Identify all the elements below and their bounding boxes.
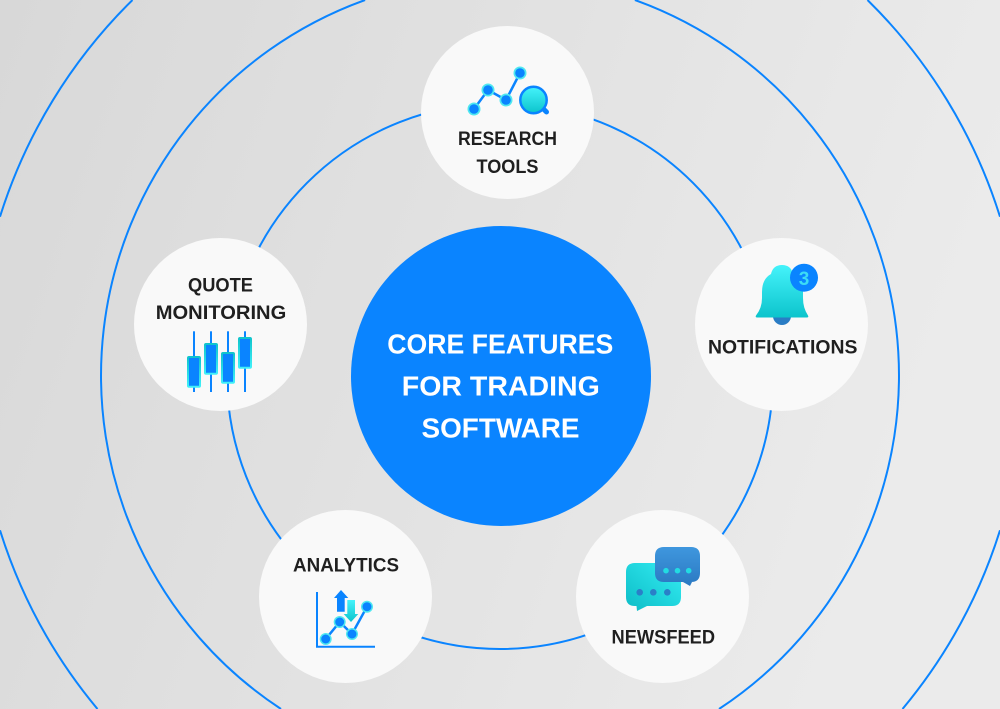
icon: chat bubbles xyxy=(626,547,700,611)
label: ANALYTICS xyxy=(293,555,399,577)
label: NEWSFEED xyxy=(612,626,715,648)
title xyxy=(387,328,613,444)
icon: bell with badge xyxy=(756,264,818,325)
label: QUOTE xyxy=(188,274,253,296)
title: FOR TRADING xyxy=(402,370,600,402)
panel: newsfeed xyxy=(576,510,749,683)
title: CORE FEATURES xyxy=(387,328,613,360)
central circle with title xyxy=(351,226,651,526)
label: NOTIFICATIONS xyxy=(708,336,857,358)
label: TOOLS xyxy=(476,156,538,178)
title: SOFTWARE xyxy=(422,412,580,444)
label xyxy=(156,274,286,324)
panel: research tools xyxy=(421,26,594,199)
panel: quote monitoring xyxy=(134,238,307,411)
icon: bell with badge: 3 xyxy=(799,269,809,290)
label: RESEARCH xyxy=(458,128,557,150)
label: MONITORING xyxy=(156,302,286,324)
label xyxy=(458,128,557,178)
icon: line chart with arrows xyxy=(317,590,375,647)
icon: candlesticks xyxy=(188,331,251,392)
panel: analytics xyxy=(259,510,432,683)
icon: chart with magnifier xyxy=(468,66,547,116)
panel: notifications xyxy=(695,238,868,411)
